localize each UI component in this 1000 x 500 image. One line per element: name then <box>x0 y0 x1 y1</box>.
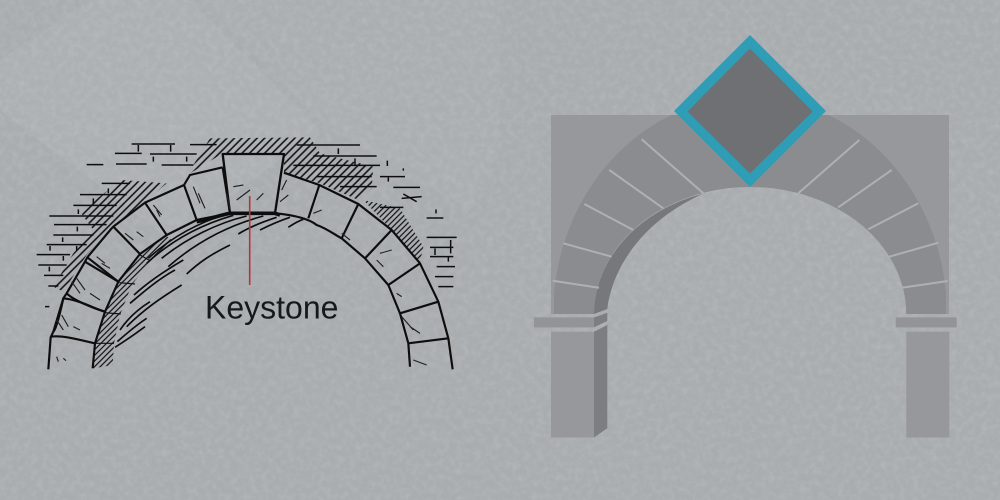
rear arch ring hatching <box>93 236 172 368</box>
voussoir stones left <box>48 167 230 369</box>
voussoir stones right <box>275 173 453 369</box>
wall and piers <box>551 115 949 438</box>
engraving artwork <box>37 137 457 369</box>
right panel: flat diagram of arch with highlighted keystone <box>534 35 957 438</box>
left capital <box>534 317 594 327</box>
left pier side face <box>594 325 607 438</box>
right capital <box>896 317 957 327</box>
keystone diamond with teal outline <box>674 35 826 187</box>
label: Keystone: Keystone <box>205 290 338 326</box>
arch stone band <box>554 97 946 314</box>
arch soffit shading strokes <box>115 214 303 347</box>
dark underside of keystone <box>197 213 280 222</box>
capital side face <box>594 313 607 327</box>
keystone block <box>223 154 284 213</box>
mortar joints <box>553 139 948 288</box>
arch soffit shadow <box>594 194 704 314</box>
left panel: engraved stone arch illustration <box>37 137 457 369</box>
hatched masonry above the arch <box>190 137 373 200</box>
red keystone pointer line <box>249 196 251 285</box>
stone surface marks <box>57 180 427 365</box>
